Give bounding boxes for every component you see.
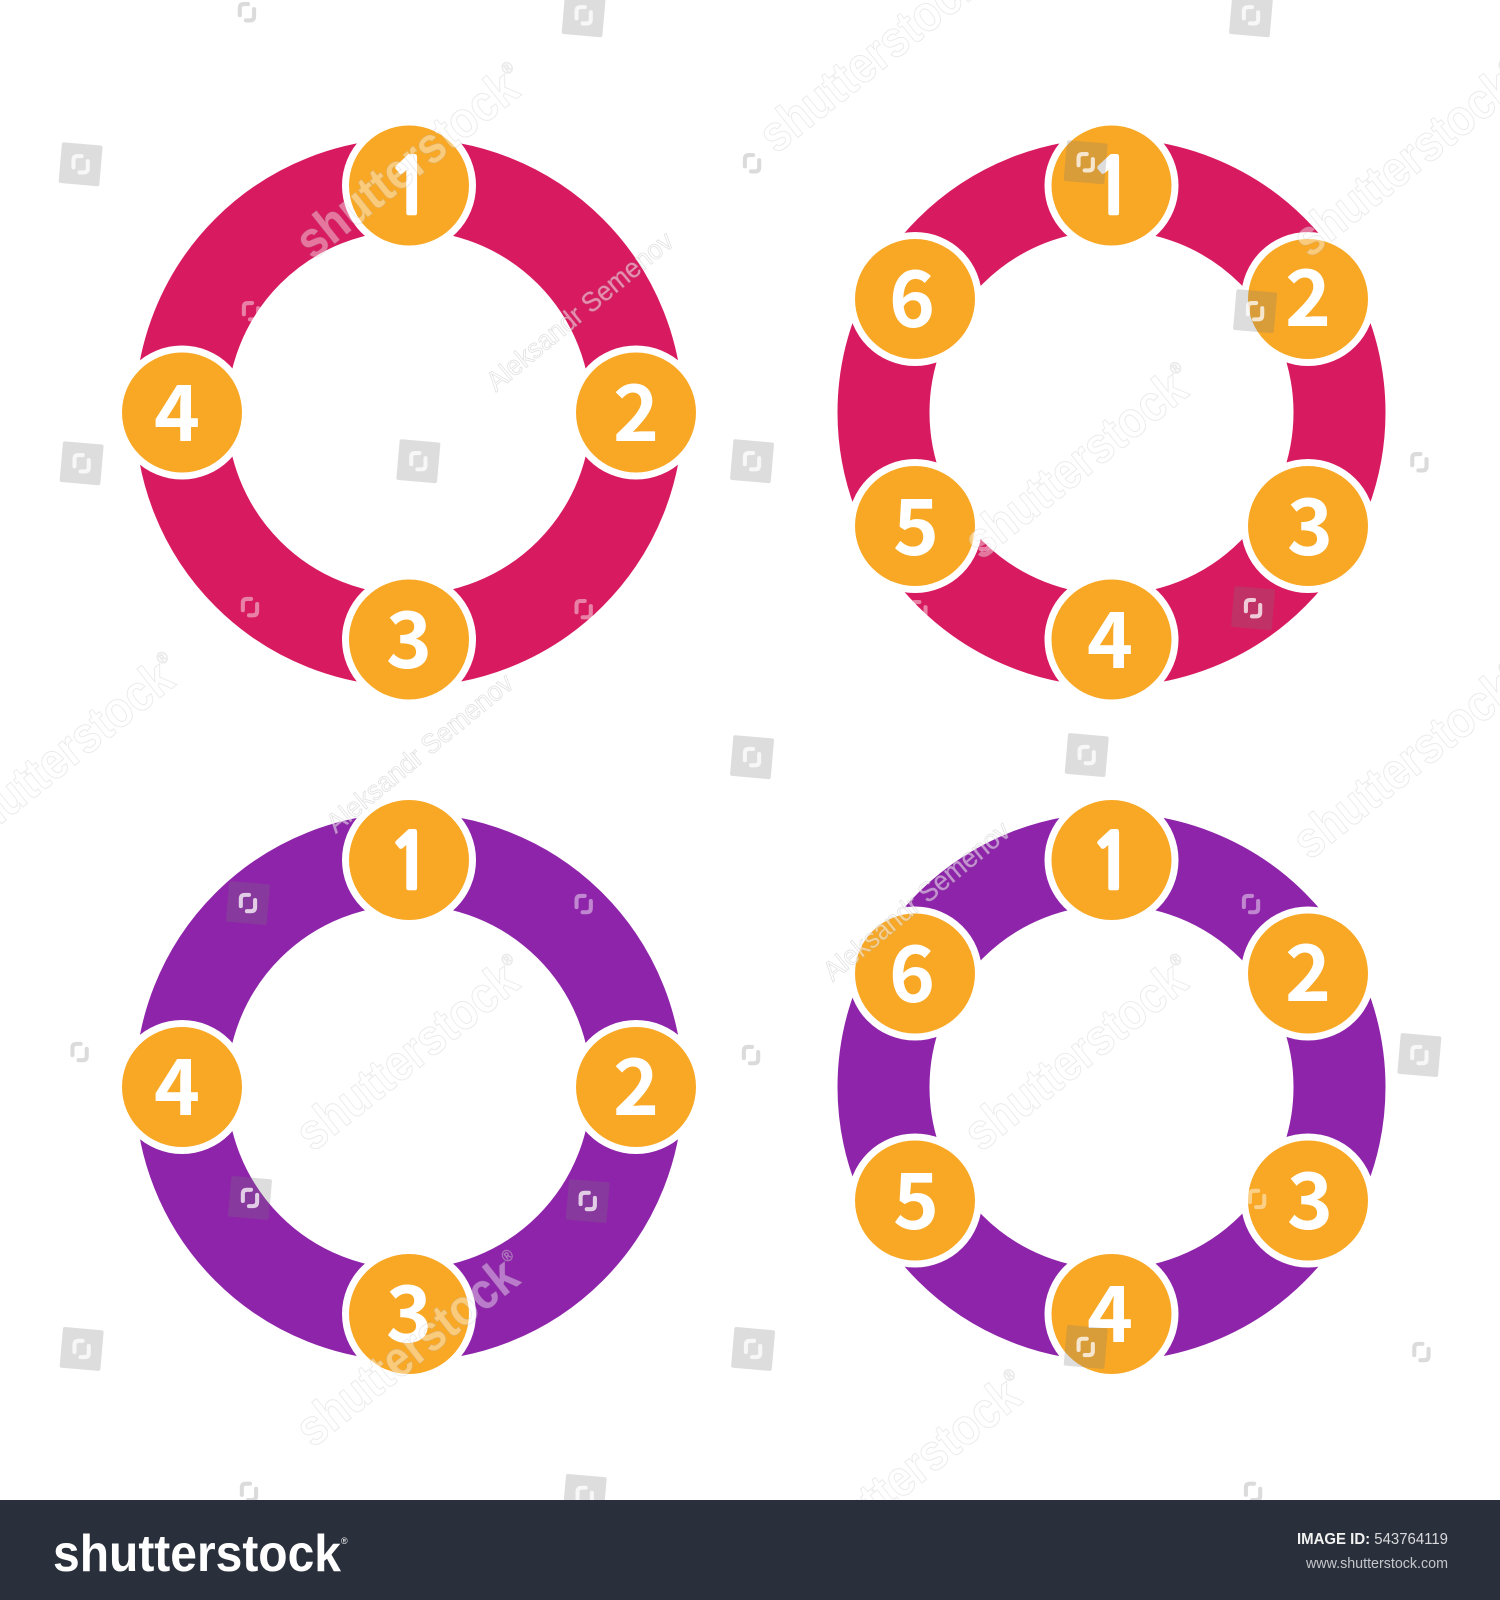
stock-photo watermark overlay: shutterstock (953, 926, 1228, 1161)
node 3: 3 (386, 1253, 432, 1365)
node 6 (848, 232, 982, 366)
node 2 (569, 346, 703, 480)
node 1: 1 (387, 825, 433, 901)
node 3 (1241, 1134, 1375, 1268)
stock-photo watermark overlay: ® (1000, 1365, 1019, 1386)
node 3: 3 (1287, 466, 1333, 578)
node 1: 1 (1089, 825, 1135, 901)
ring: crimson (181, 184, 637, 640)
image id: IMAGE ID: 543764119 (1297, 1531, 1448, 1548)
node 1 (342, 793, 476, 927)
stock-photo watermark overlay: shutterstock (284, 1222, 559, 1457)
node 1: 1 (387, 150, 433, 226)
stock-photo watermark overlay: shutterstock (786, 1341, 1061, 1577)
stock-photo watermark overlay: ® (498, 58, 517, 79)
node 2 (569, 1020, 703, 1154)
stock-photo watermark overlay: shutterstock (284, 926, 559, 1161)
node 4: 4 (154, 1026, 200, 1138)
node 3 (342, 1247, 476, 1381)
node 1 (342, 118, 476, 252)
node 6: 6 (889, 238, 935, 350)
ring: purple (884, 859, 1340, 1315)
node 5: 5 (893, 466, 939, 578)
node 1 (1044, 118, 1178, 252)
panel: bottom-right purple ring with 6 steps (848, 793, 1375, 1381)
node 3: 3 (386, 579, 432, 691)
node 3 (1241, 459, 1375, 593)
node 5 (848, 1134, 982, 1268)
node 2: 2 (613, 352, 659, 464)
node 4: 4 (1087, 579, 1133, 691)
stock-photo watermark overlay: shutterstock (953, 334, 1228, 569)
panel: top-right crimson ring with 6 steps (848, 118, 1375, 706)
footer bar (0, 1500, 1500, 1600)
node 2: 2 (613, 1026, 659, 1138)
stock-photo watermark overlay: shutterstock (284, 34, 559, 269)
node 3 (342, 572, 476, 706)
stock-photo watermark overlay: Aleksandr Semenov (480, 225, 679, 397)
node 5: 5 (893, 1140, 939, 1252)
stock-photo watermark overlay: ® (1166, 950, 1186, 970)
stock-photo watermark overlay: Aleksandr Semenov (320, 667, 519, 839)
node 2 (1241, 232, 1375, 366)
node 5 (848, 459, 982, 593)
footer logo: shutterstock (53, 1525, 341, 1583)
node 4 (1044, 1247, 1178, 1381)
node 1: 1 (1089, 150, 1135, 226)
node 4: 4 (154, 352, 200, 464)
website: www.shutterstock.com (1305, 1555, 1448, 1572)
panel: top-left crimson ring with 4 steps (115, 118, 703, 706)
panel: bottom-left purple ring with 4 steps (115, 793, 703, 1381)
stock-photo watermark overlay: ® (1166, 358, 1186, 379)
node 4 (115, 346, 249, 480)
ring: crimson (884, 184, 1340, 640)
node 6 (848, 906, 982, 1040)
node 3: 3 (1287, 1140, 1333, 1252)
node 2: 2 (1285, 237, 1331, 349)
stock-photo watermark overlay: Aleksandr Semenov (817, 815, 1016, 987)
node 6: 6 (889, 913, 935, 1025)
stock-photo watermark overlay: ® (498, 1246, 517, 1266)
node 4 (115, 1020, 249, 1154)
stock-photo watermark overlay: ® (498, 950, 517, 970)
ring: purple (181, 859, 637, 1315)
node 4 (1044, 572, 1178, 706)
node 2 (1241, 906, 1375, 1040)
stock-photo watermark overlay: ® (153, 648, 172, 668)
registered mark: ® (341, 1536, 348, 1546)
node 4: 4 (1087, 1253, 1133, 1365)
node 2: 2 (1285, 912, 1331, 1024)
node 1 (1044, 793, 1178, 927)
